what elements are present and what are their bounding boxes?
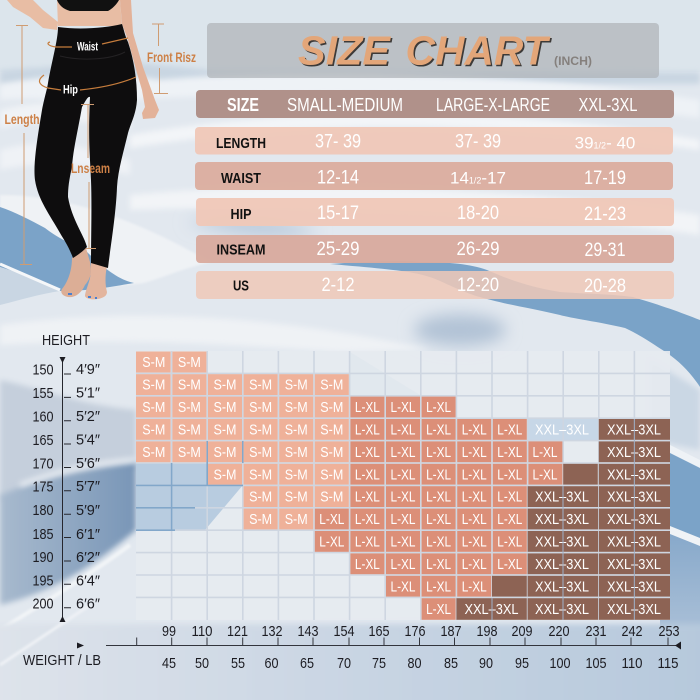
height axis: 160 — [32, 408, 54, 426]
size grid row 8: L-XL — [355, 512, 380, 528]
weight axis: 132 — [262, 623, 282, 640]
height axis: 6′2″ — [76, 549, 101, 566]
height axis: 165 — [32, 432, 54, 449]
size grid row 3 — [136, 397, 456, 417]
weight axis: 110 — [622, 655, 642, 672]
table row: us: US — [233, 278, 249, 294]
size grid row 1: S-M — [142, 355, 165, 371]
arms and torso — [7, 0, 122, 30]
table row: waist: WAIST — [221, 171, 261, 187]
size grid row 4: L-XL — [426, 422, 451, 438]
size grid row 7: S-M — [285, 490, 308, 506]
size grid row 3: L-XL — [390, 400, 416, 416]
table row: length: 37- 39 — [315, 132, 361, 152]
size grid row 10: L-XL — [355, 557, 380, 573]
height axis: 4′9″ — [76, 361, 101, 378]
size grid row 10: L-XL — [462, 557, 487, 573]
height axis: 5′7″ — [76, 478, 101, 495]
size grid row 12: XXL–3XL — [535, 602, 589, 618]
size grid row 10 — [350, 553, 670, 574]
table row: length: LENGTH — [216, 136, 266, 152]
title shadow: SIZE — [300, 29, 393, 75]
weight axis: 220 — [548, 623, 570, 640]
weight axis: 253 — [658, 623, 680, 640]
measurement: length — [4, 25, 40, 264]
size grid row 4: S-M — [214, 422, 236, 438]
height axis: 195 — [32, 572, 54, 590]
toenails — [68, 293, 97, 299]
size grid row 5: S-M — [320, 445, 343, 461]
size grid row 8: S-M — [285, 512, 308, 528]
black leggings — [34, 24, 137, 268]
size grid row 8 — [244, 509, 670, 529]
size grid row 6: S-M — [249, 468, 272, 484]
weight axis: 95 — [515, 655, 529, 672]
chart grid background — [136, 351, 670, 620]
measurement: inseam: Lnseam — [71, 161, 110, 176]
table header row: SIZE — [227, 94, 259, 115]
weight axis: 110 — [192, 623, 212, 640]
size grid row 8: S-M — [249, 512, 272, 528]
table header row — [196, 90, 674, 118]
size grid row 3: S-M — [178, 400, 201, 416]
bottom band — [0, 624, 700, 700]
size grid row 6: L-XL — [426, 468, 451, 484]
size grid row 5 — [136, 441, 670, 462]
size grid row 11: XXL–3XL — [535, 580, 589, 596]
title shadow: CHART — [407, 29, 552, 75]
table header row: LARGE-X-LARGE — [436, 94, 550, 115]
black sports top — [57, 0, 119, 11]
size grid row 5: S-M — [249, 445, 272, 461]
size grid row 8: XXL–3XL — [607, 512, 661, 528]
size grid row 4: L-XL — [497, 422, 522, 438]
size grid row 4 — [136, 419, 670, 440]
size grid row 4: L-XL — [355, 422, 380, 438]
size grid row 7: XXL–3XL — [535, 490, 589, 506]
weight axis: 90 — [479, 655, 493, 672]
size grid row 6: L-XL — [462, 468, 487, 484]
size grid row 2 — [136, 374, 349, 395]
height axis: 6′6″ — [76, 596, 101, 612]
table row: us: 20-28 — [584, 276, 626, 297]
size grid row 7: L-XL — [497, 490, 522, 506]
weight axis: 55 — [231, 655, 245, 672]
weight axis: 70 — [337, 655, 351, 672]
size grid row 3: L-XL — [426, 400, 451, 416]
weight axis: 105 — [586, 655, 606, 672]
size grid row 5: XXL–3XL — [607, 445, 661, 461]
table header row: SMALL-MEDIUM — [287, 94, 403, 115]
height axis: 170 — [32, 456, 54, 472]
size grid row 7: L-XL — [390, 490, 416, 506]
table row: inseam: 26-29 — [456, 239, 500, 260]
size grid row 10: L-XL — [390, 557, 416, 573]
weight axis: WEIGHT / LB — [23, 652, 101, 669]
measurement: length: Length — [4, 112, 40, 127]
size grid row 9 — [315, 531, 670, 552]
table row: waist: 17-19 — [584, 168, 626, 189]
size grid row 7: L-XL — [426, 490, 451, 506]
size grid row 9: L-XL — [497, 534, 522, 550]
table row: waist: 12-14 — [317, 168, 359, 188]
table row: length: 37- 39 — [455, 132, 501, 152]
size grid row 3: S-M — [214, 400, 236, 416]
size grid row 3: S-M — [249, 400, 272, 416]
table row: inseam: 29-31 — [584, 240, 626, 261]
table row: waist: 141/2-17 — [450, 168, 506, 188]
height axis: 5′6″ — [76, 455, 101, 472]
height axis: 175 — [32, 478, 54, 496]
weight axis: 45 — [162, 655, 176, 672]
blue silk right — [330, 261, 700, 387]
height axis: 6′1″ — [76, 526, 101, 543]
weight axis: 100 — [550, 655, 570, 672]
measurement: front rise: Front Risz — [147, 50, 196, 65]
size grid row 6: L-XL — [497, 468, 522, 484]
size grid row 6: L-XL — [390, 468, 416, 484]
size grid row 3: L-XL — [355, 400, 380, 416]
table row: hip: 15-17 — [317, 203, 359, 224]
table row: us — [196, 271, 674, 299]
table row: waist — [195, 162, 673, 190]
size grid row 7: XXL–3XL — [607, 490, 661, 506]
size grid row 5: S-M — [142, 445, 165, 461]
size grid row 2: S-M — [249, 378, 272, 394]
title banner — [207, 23, 659, 78]
feet — [61, 248, 91, 297]
weight axis: 80 — [408, 655, 422, 672]
size grid row 6: L-XL — [355, 468, 380, 484]
size grid row 8: XXL–3XL — [535, 512, 589, 528]
unit label: (INCH) — [554, 54, 592, 68]
table row: length: 391/2- 40 — [575, 134, 635, 152]
size grid row 6: S-M — [214, 468, 236, 484]
size grid row 7 — [244, 486, 670, 507]
size grid row 9: L-XL — [462, 534, 487, 550]
weight axis: 165 — [368, 623, 390, 640]
size grid row 4: S-M — [178, 422, 201, 438]
size grid row 8: L-XL — [319, 512, 344, 528]
size grid row 9: L-XL — [319, 534, 344, 550]
size grid row 11: XXL–3XL — [607, 580, 661, 596]
size grid row 3: S-M — [320, 400, 343, 416]
size grid row 10: XXL–3XL — [535, 557, 589, 573]
size grid row 2: S-M — [285, 378, 308, 394]
size grid row 2: S-M — [214, 378, 236, 394]
title shadow — [300, 29, 552, 75]
height axis: 5′9″ — [76, 502, 101, 519]
size grid row 4: S-M — [320, 422, 343, 438]
size grid row 5: S-M — [178, 445, 201, 461]
measurement: hip: Hip — [63, 82, 78, 96]
weight axis: 85 — [444, 655, 458, 672]
size grid row 3: S-M — [285, 400, 308, 416]
blue hill left — [0, 207, 134, 291]
height axis: 180 — [32, 502, 54, 519]
title text: CHART — [406, 28, 550, 74]
size grid row 4: S-M — [142, 422, 165, 438]
size grid row 7: L-XL — [355, 490, 380, 506]
size grid row 6 — [208, 464, 670, 485]
size grid row 1: S-M — [178, 355, 201, 371]
weight axis: 65 — [300, 655, 314, 672]
size grid row 12: XXL–3XL — [607, 602, 661, 618]
size grid row 4: L-XL — [390, 422, 416, 438]
size grid row 10: XXL–3XL — [607, 557, 661, 573]
size grid row 6: XXL–3XL — [607, 468, 661, 484]
size grid row 10: L-XL — [497, 557, 522, 573]
size grid row 8: L-XL — [497, 512, 522, 528]
weight axis: 176 — [404, 623, 426, 640]
size grid row 5: L-XL — [426, 445, 451, 461]
weight axis: 198 — [476, 623, 498, 640]
size grid row 6: S-M — [320, 468, 343, 484]
table row: inseam: 25-29 — [316, 239, 360, 260]
title text: SIZE — [298, 28, 392, 74]
title text — [298, 28, 550, 74]
size grid row 7: S-M — [249, 490, 272, 506]
table row: hip: HIP — [230, 207, 252, 223]
height axis: 6′4″ — [76, 572, 101, 590]
size grid row 5: S-M — [214, 445, 236, 461]
size grid row 8: L-XL — [390, 512, 416, 528]
weight axis: 209 — [512, 623, 532, 640]
table row: length — [195, 127, 673, 154]
size grid row 4: S-M — [249, 422, 272, 438]
size grid row 11: L-XL — [462, 580, 487, 596]
size grid row 7: S-M — [320, 490, 343, 506]
size grid row 12: XXL–3XL — [464, 602, 518, 618]
size grid row 3: S-M — [142, 400, 165, 416]
height axis: 5′2″ — [76, 408, 101, 425]
size grid row 5: L-XL — [390, 445, 416, 461]
size grid row 5: L-XL — [462, 445, 487, 461]
size grid row 9: L-XL — [355, 534, 380, 550]
weight axis: 143 — [298, 623, 318, 640]
figure: model in black leggings — [7, 0, 159, 299]
weight axis — [23, 623, 681, 672]
size grid row 8: L-XL — [462, 512, 487, 528]
size grid row 6: S-M — [285, 468, 308, 484]
weight axis: 75 — [372, 655, 386, 672]
size grid row 9: L-XL — [426, 534, 451, 550]
table row: hip — [196, 198, 674, 226]
size grid row 5: L-XL — [532, 445, 558, 461]
weight axis: 121 — [227, 623, 248, 640]
size grid row 2: S-M — [142, 378, 165, 394]
size grid row 1 — [136, 352, 206, 372]
size grid row 4: L-XL — [462, 422, 487, 438]
left panel hills — [0, 380, 136, 500]
height axis: HEIGHT — [42, 332, 90, 349]
size grid row 11: L-XL — [390, 580, 416, 596]
height axis: 200 — [32, 596, 54, 612]
size grid row 11: L-XL — [426, 580, 451, 596]
size grid row 8: L-XL — [426, 512, 451, 528]
size grid row 5: L-XL — [497, 445, 522, 461]
weight axis: 187 — [440, 623, 462, 640]
size grid row 4: S-M — [285, 422, 308, 438]
table row: us: 12-20 — [457, 275, 499, 296]
measurement: hip — [39, 75, 136, 96]
size grid row 9: L-XL — [390, 534, 416, 550]
size grid row 10: L-XL — [426, 557, 451, 573]
height axis — [32, 332, 101, 622]
measurement: inseam — [71, 104, 110, 248]
height axis: 150 — [32, 362, 54, 378]
height axis: 155 — [32, 385, 54, 402]
size grid row 2: S-M — [178, 378, 201, 394]
height axis: 5′4″ — [76, 432, 101, 448]
size grid row 12: L-XL — [426, 602, 451, 618]
size grid row 11 — [386, 576, 670, 597]
size grid row 9: XXL–3XL — [607, 534, 661, 550]
size grid row 7: L-XL — [462, 490, 487, 506]
right strip — [650, 360, 700, 450]
table row: hip: 21-23 — [584, 204, 626, 225]
weight axis: 154 — [334, 623, 354, 640]
height axis: 190 — [32, 549, 54, 566]
weight axis: 231 — [586, 623, 606, 640]
weight axis: 99 — [162, 623, 176, 640]
size grid row 4: XXL–3XL — [535, 422, 589, 438]
measurement: front rise — [147, 24, 196, 94]
table header row: XXL-3XL — [578, 94, 638, 115]
pale hill behind calves — [0, 195, 210, 290]
table row: hip: 18-20 — [457, 203, 499, 224]
height axis: 185 — [32, 526, 54, 543]
weight axis: 115 — [658, 655, 678, 672]
weight axis: 50 — [195, 655, 209, 672]
size grid row 5: L-XL — [355, 445, 380, 461]
height axis: 5′1″ — [76, 384, 101, 402]
size grid row 6: L-XL — [532, 468, 558, 484]
size grid row 4: XXL–3XL — [607, 422, 661, 438]
size grid row 5: S-M — [285, 445, 308, 461]
column seams across merged XXL cells — [492, 419, 634, 620]
measurement: waist: Waist — [77, 40, 98, 54]
weight axis: 242 — [622, 623, 642, 640]
measurement: waist — [48, 38, 128, 54]
table row: us: 2-12 — [322, 275, 354, 296]
size grid row 9: XXL–3XL — [535, 534, 589, 550]
table row: inseam: INSEAM — [216, 242, 266, 258]
size grid row 2: S-M — [320, 378, 343, 394]
size grid row 12 — [422, 598, 670, 620]
table row: inseam — [196, 235, 674, 263]
weight axis: 60 — [264, 655, 278, 672]
